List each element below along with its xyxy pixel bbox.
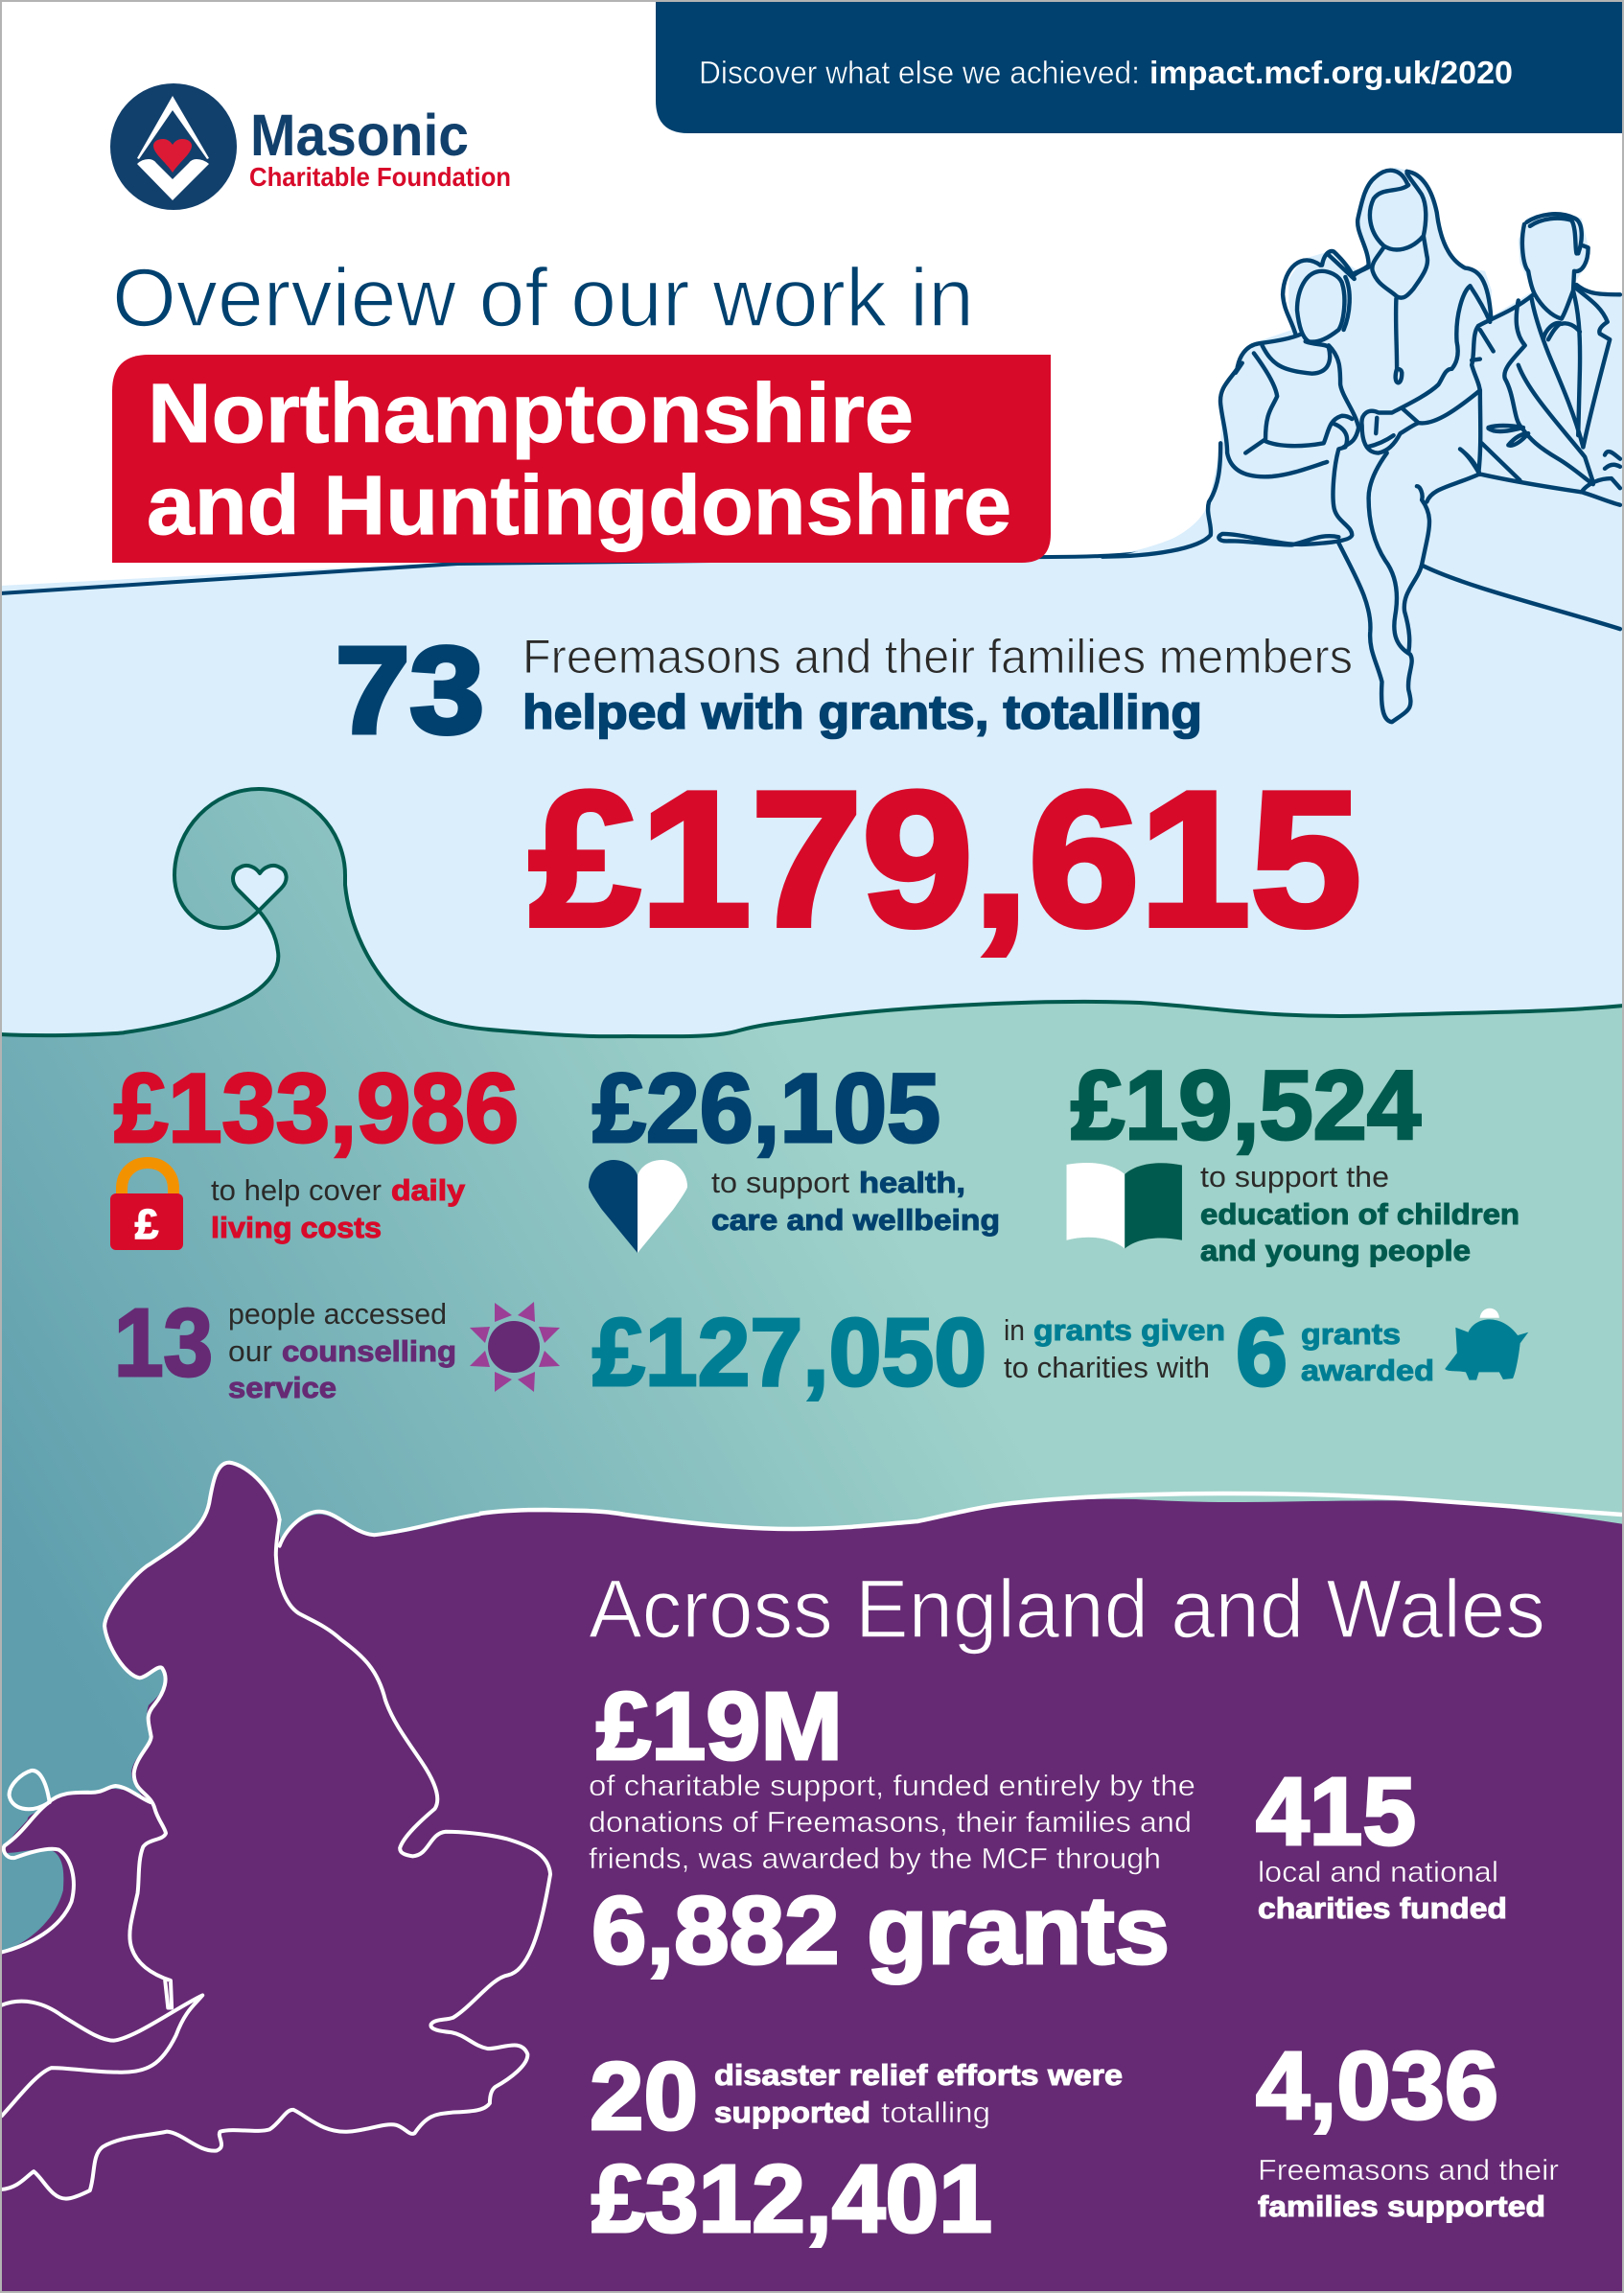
stat: disaster relief — [590, 2043, 1123, 2150]
label: counselling — [228, 1297, 456, 1404]
label: charities: charities funded — [1258, 1891, 1507, 1925]
label: counselling: counselling — [282, 1334, 456, 1368]
line: top wave — [0, 534, 1210, 593]
banner: discover more — [656, 2, 1622, 133]
banner text: Discover what else we achieved: — [699, 55, 1140, 90]
stat: grants to charities: £127,050 — [592, 1299, 986, 1406]
label: disaster relief — [714, 2058, 1123, 2129]
heart cut-out in curl — [233, 866, 287, 911]
stat: families supported: 4,036 — [1256, 2032, 1498, 2140]
stat: counselling: 13 — [114, 1289, 213, 1397]
label: families: Freemasons and their — [1258, 2153, 1559, 2187]
label: grants given: grants given — [1033, 1313, 1225, 1347]
icon: padlock — [110, 1163, 183, 1250]
stat: health care and wellbeing — [589, 1054, 1000, 1253]
logo word Charitable Foundation: Charitable Foundation — [249, 162, 511, 192]
icon: two-tone heart — [589, 1160, 687, 1253]
logo heart — [153, 139, 192, 173]
stat: disaster relief amount: £312,401 — [592, 2145, 992, 2253]
icon: padlock: £ — [135, 1201, 159, 1248]
stat: 19M support: £19M — [596, 1673, 843, 1780]
stat: education: £19,524 — [1071, 1051, 1421, 1160]
stat: 19M support — [589, 1673, 1195, 1875]
label: grants awarded — [1301, 1317, 1434, 1387]
stat: 415 charities — [1256, 1758, 1507, 1925]
label: living costs — [211, 1173, 466, 1244]
label: grants given — [1004, 1313, 1225, 1384]
label: living costs: daily — [391, 1173, 466, 1207]
label: disaster relief: disaster relief efforts were — [714, 2058, 1123, 2092]
stat: daily living costs — [110, 1054, 519, 1250]
map: white coastline — [2, 1463, 550, 2199]
stat: counselling — [114, 1289, 560, 1404]
label: health: care and wellbeing — [711, 1203, 1000, 1237]
stat: daily living costs: £133,986 — [114, 1054, 519, 1163]
label: counselling: people accessed — [228, 1297, 447, 1331]
stat: health care and wellbeing: £26,105 — [592, 1054, 940, 1163]
background: light blue wave — [0, 508, 1624, 1246]
label: grants awarded: grants — [1301, 1317, 1401, 1351]
banner text — [699, 55, 1513, 90]
map: England and Wales fill — [0, 1464, 484, 2293]
stat: education — [1067, 1051, 1520, 1267]
panel: purple England and Wales section — [0, 1463, 1624, 2293]
label: families — [1258, 2153, 1559, 2223]
stat label light: Freemasons and their families members — [522, 630, 1353, 683]
stat: total amount: £179,615 — [529, 753, 1361, 966]
region line one: Northamptonshire — [148, 367, 914, 460]
label: grants given: in — [1004, 1313, 1025, 1347]
stat: grants to charities — [592, 1299, 1528, 1406]
line: white wave on top of purple — [479, 1494, 1622, 1529]
description of support — [589, 1769, 1195, 1875]
label: health: health, — [859, 1166, 965, 1199]
stat: 73 people helped: 73 — [336, 622, 484, 759]
label: disaster relief: totalling — [881, 2096, 990, 2129]
logo compass — [137, 96, 209, 159]
stat: disaster relief: 20 — [590, 2043, 698, 2150]
label: education — [1200, 1160, 1520, 1267]
stat: 415 charities: 415 — [1256, 1758, 1416, 1865]
label: counselling: service — [228, 1371, 336, 1404]
icon: piggy bank — [1445, 1309, 1528, 1380]
label: grants awarded: awarded — [1301, 1354, 1434, 1387]
label: education: education of children — [1200, 1197, 1520, 1231]
heading: region name on red box — [112, 355, 1051, 563]
region line two: and Huntingdonshire — [147, 459, 1011, 552]
label: counselling: our — [228, 1334, 272, 1368]
label: disaster relief: supported — [714, 2096, 870, 2129]
family outline strokes — [1102, 171, 1620, 722]
label: health: to support — [711, 1166, 849, 1199]
logo: Masonic Charitable Foundation — [110, 83, 511, 210]
banner text: impact.mcf.org.uk/2020 — [1149, 55, 1513, 90]
logo square — [137, 159, 209, 200]
number of grants: 6 — [1236, 1299, 1288, 1406]
icon: open book — [1067, 1163, 1182, 1248]
label: living costs: to help cover — [211, 1173, 382, 1207]
heading: Across England and Wales: Across England and Wales — [589, 1563, 1545, 1656]
label: health — [711, 1166, 1000, 1237]
stat: 73 people helped — [336, 622, 1353, 759]
line: wave with heart — [0, 789, 1624, 1036]
icon: sun — [470, 1302, 560, 1392]
description of support: of charitable support, funded entirely by the — [589, 1769, 1195, 1802]
label: grants given: to charities with — [1004, 1351, 1210, 1384]
label: charities: local and national — [1258, 1855, 1498, 1888]
label: families: families supported — [1258, 2189, 1545, 2223]
stat: 6,882 grants: 6,882 grants — [592, 1877, 1170, 1984]
background: teal wave with heart curl — [0, 789, 1624, 2293]
stat: families supported — [1256, 2032, 1559, 2223]
description of support: donations of Freemasons, their families and — [589, 1805, 1192, 1839]
description of support: friends, was awarded by the MCF through — [589, 1841, 1161, 1875]
label: charities — [1258, 1855, 1507, 1925]
label: education: to support the — [1200, 1160, 1389, 1193]
stat label bold: helped with grants, totalling — [522, 685, 1202, 739]
illustration: line-drawn family on sofa — [1102, 168, 1624, 760]
label: education: and young people — [1200, 1234, 1471, 1267]
label: living costs: living costs — [211, 1211, 382, 1244]
logo word Masonic: Masonic — [250, 103, 469, 168]
title: overview: Overview of our work in — [112, 252, 974, 344]
